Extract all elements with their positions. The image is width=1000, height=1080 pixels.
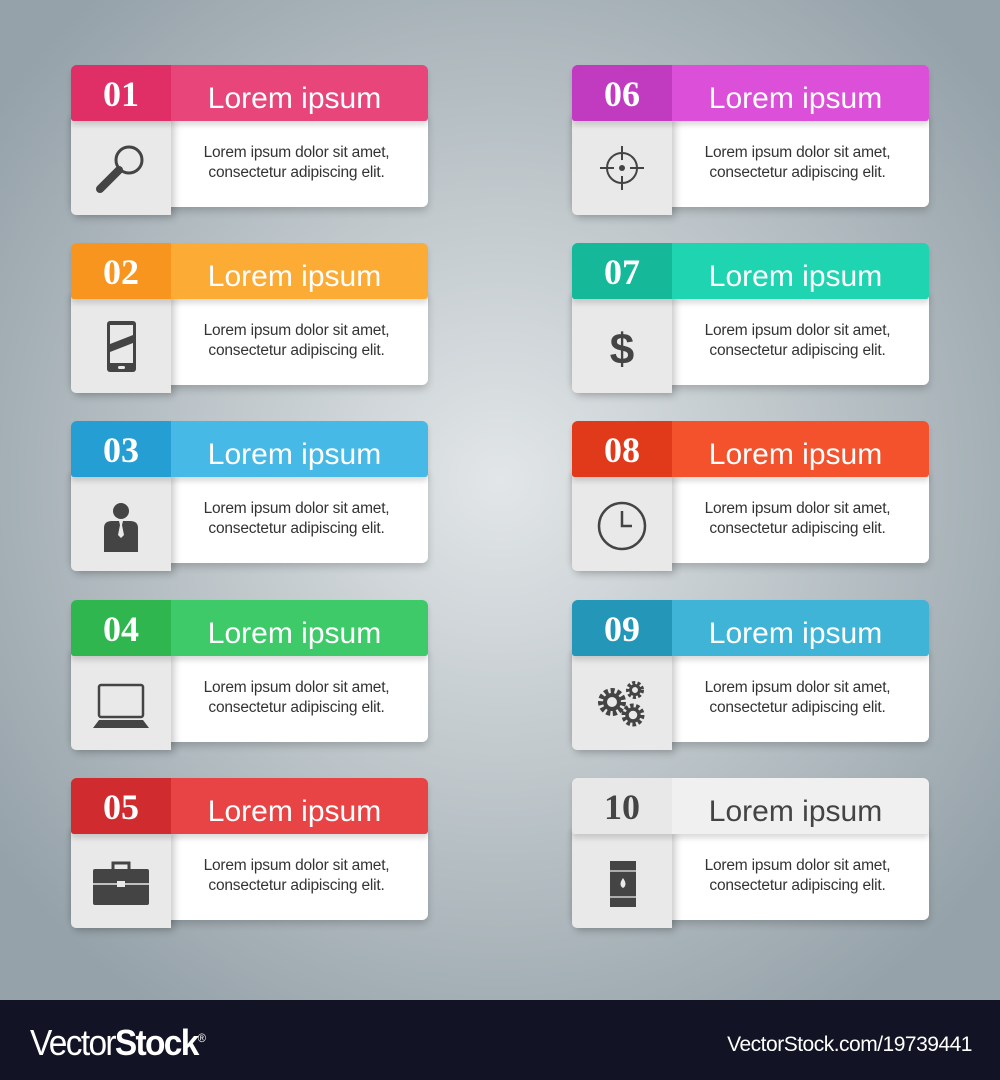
card 08: 08 bbox=[604, 430, 640, 470]
card 02: 02 bbox=[103, 252, 139, 292]
icon: target bbox=[600, 146, 644, 190]
card 06: consectetur adipiscing elit. bbox=[709, 164, 886, 181]
footer: VectorStock® bbox=[30, 1022, 204, 1063]
icon: magnifier bbox=[96, 146, 144, 193]
card 01: Lorem ipsum dolor sit amet, bbox=[204, 144, 389, 161]
card 06: 06 bbox=[604, 74, 640, 114]
card 02: consectetur adipiscing elit. bbox=[208, 342, 385, 359]
card 05: Lorem ipsum bbox=[208, 795, 381, 828]
card 10 bbox=[568, 778, 932, 934]
card 09: Lorem ipsum bbox=[709, 617, 882, 650]
card 07: Lorem ipsum dolor sit amet, bbox=[705, 322, 890, 339]
card 10: consectetur adipiscing elit. bbox=[709, 877, 886, 894]
icon: briefcase bbox=[93, 862, 149, 905]
card 04 bbox=[67, 600, 432, 756]
card 05: Lorem ipsum dolor sit amet, bbox=[204, 857, 389, 874]
card 01: consectetur adipiscing elit. bbox=[208, 164, 385, 181]
card 07: Lorem ipsum bbox=[709, 260, 882, 293]
card 10: Lorem ipsum bbox=[709, 795, 882, 828]
card 08: consectetur adipiscing elit. bbox=[709, 520, 886, 537]
card 01 bbox=[68, 65, 432, 222]
card 08 bbox=[568, 421, 932, 578]
card 09: Lorem ipsum dolor sit amet, bbox=[705, 679, 890, 696]
footer: VectorStock.com/19739441 bbox=[727, 1033, 972, 1056]
card 02: Lorem ipsum bbox=[208, 260, 381, 293]
card 07: 07 bbox=[604, 252, 640, 292]
card 05: 05 bbox=[103, 787, 139, 827]
card 06 bbox=[568, 65, 932, 222]
card 05: consectetur adipiscing elit. bbox=[208, 877, 385, 894]
card 09: 09 bbox=[604, 609, 640, 649]
icon: gears bbox=[598, 681, 644, 726]
card 09: consectetur adipiscing elit. bbox=[709, 699, 886, 716]
card 03: consectetur adipiscing elit. bbox=[208, 520, 385, 537]
card 10: Lorem ipsum dolor sit amet, bbox=[705, 857, 890, 874]
card 08: Lorem ipsum bbox=[709, 438, 882, 471]
icon: person bbox=[104, 503, 138, 552]
card 10: 10 bbox=[604, 787, 640, 827]
card 04: Lorem ipsum bbox=[208, 617, 381, 650]
card 04: consectetur adipiscing elit. bbox=[208, 699, 385, 716]
card 07 bbox=[568, 243, 932, 400]
card 04: Lorem ipsum dolor sit amet, bbox=[204, 679, 389, 696]
card 02: Lorem ipsum dolor sit amet, bbox=[204, 322, 389, 339]
icon: clock bbox=[598, 502, 646, 550]
card 07: consectetur adipiscing elit. bbox=[709, 342, 886, 359]
card 08: Lorem ipsum dolor sit amet, bbox=[705, 500, 890, 517]
card 06: Lorem ipsum bbox=[709, 82, 882, 115]
card 01: 01 bbox=[103, 74, 139, 114]
card 05 bbox=[68, 778, 432, 934]
icon: dollar: $ bbox=[610, 325, 634, 374]
card 03: Lorem ipsum bbox=[208, 438, 381, 471]
card 02 bbox=[67, 243, 432, 400]
card 03 bbox=[67, 421, 432, 578]
card 06: Lorem ipsum dolor sit amet, bbox=[705, 144, 890, 161]
icon: oil barrel bbox=[610, 861, 636, 907]
card 03: Lorem ipsum dolor sit amet, bbox=[204, 500, 389, 517]
card 04: 04 bbox=[103, 609, 139, 649]
card 09 bbox=[568, 600, 932, 756]
card 03: 03 bbox=[103, 430, 139, 470]
card 01: Lorem ipsum bbox=[208, 82, 381, 115]
icon: laptop bbox=[93, 684, 149, 728]
footer bbox=[0, 1000, 1000, 1080]
icon: phone bbox=[107, 321, 136, 372]
